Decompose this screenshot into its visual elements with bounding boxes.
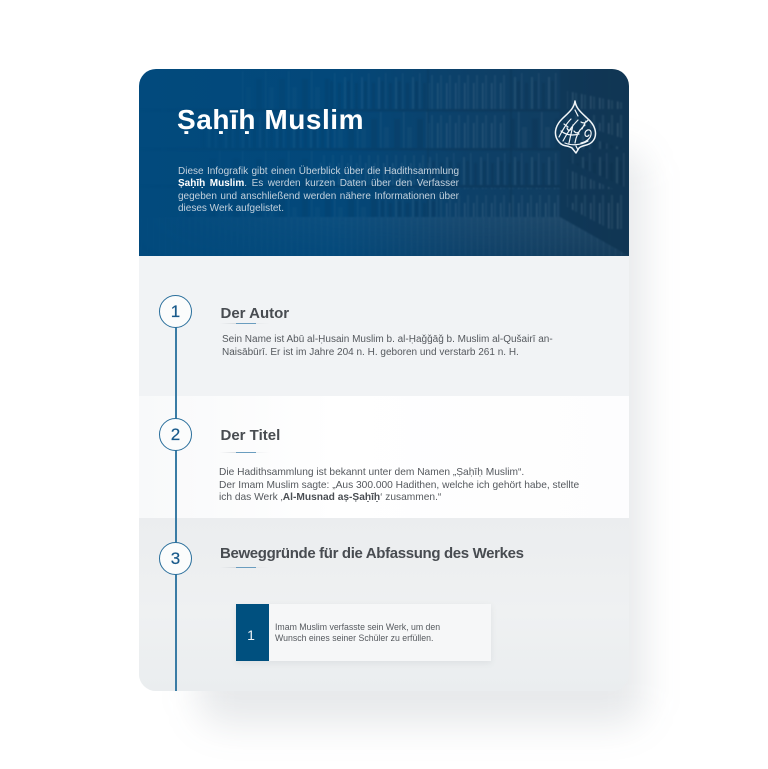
reason text: Imam Muslim verfasste sein Werk, um den <box>275 622 440 632</box>
introduction text: gegeben und anschließend werden nähere Informationen über <box>178 191 459 202</box>
reason text <box>275 622 440 643</box>
step 2 marker: 2 <box>171 425 180 444</box>
timeline line <box>175 309 177 691</box>
author text: Sein Name ist Abū al-Ḥusain Muslim b. al-Ḥaǧǧāǧ b. Muslim al-Qušairī an- <box>222 334 553 344</box>
introduction text: Diese Infografik gibt einen Überblick über die Hadithsammlung <box>178 166 459 176</box>
step 2 marker <box>159 418 192 451</box>
card shadow <box>198 150 644 725</box>
reason card 1 <box>236 604 491 661</box>
panel: der Titel <box>139 396 629 518</box>
step 3 marker: 3 <box>171 549 180 568</box>
introduction text: Ṣaḥīḥ Muslim. Es werden kurzen Daten über den Verfasser <box>178 178 459 189</box>
introduction text: dieses Werk aufgelistet. <box>178 203 284 214</box>
heading: Der Titel: Der Titel <box>220 427 280 444</box>
heading underline <box>220 452 270 453</box>
infographic card <box>139 69 629 691</box>
introduction text <box>178 166 459 214</box>
heading: Der Autor: Der Autor <box>220 304 289 322</box>
panel: header banner <box>139 69 629 256</box>
heading underline <box>220 567 270 568</box>
title text: Die Hadithsammlung ist bekannt unter dem Namen „Ṣaḥīḥ Muslim“. <box>219 467 524 478</box>
step 1 marker <box>159 295 192 328</box>
heading: Beweggründe: Beweggründe für die Abfassung des Werkes <box>220 545 524 562</box>
heading underline <box>220 323 270 324</box>
icon: calligraphy emblem <box>554 100 596 154</box>
author text <box>222 334 553 358</box>
title text: ich das Werk ‚Al-Musnad aṣ-Ṣaḥīḥ‘ zusammen.“ <box>219 492 441 503</box>
library background illustration <box>296 69 629 254</box>
step 3 marker <box>159 542 192 575</box>
title text: Der Imam Muslim sagte: „Aus 300.000 Hadithen, welche ich gehört habe, stellte <box>219 480 579 491</box>
panel: der Autor <box>139 256 629 396</box>
author text: Naisābūrī. Er ist im Jahre 204 n. H. geboren und verstarb 261 n. H. <box>222 346 519 358</box>
reason number <box>236 604 269 661</box>
panel: Beweggründe <box>139 518 629 691</box>
step 1 marker: 1 <box>171 302 180 321</box>
reason text: Wunsch eines seiner Schüler zu erfüllen. <box>275 633 433 643</box>
title text <box>219 467 579 503</box>
title: Ṣaḥīḥ Muslim <box>177 104 364 135</box>
reason number: 1 <box>247 627 255 643</box>
